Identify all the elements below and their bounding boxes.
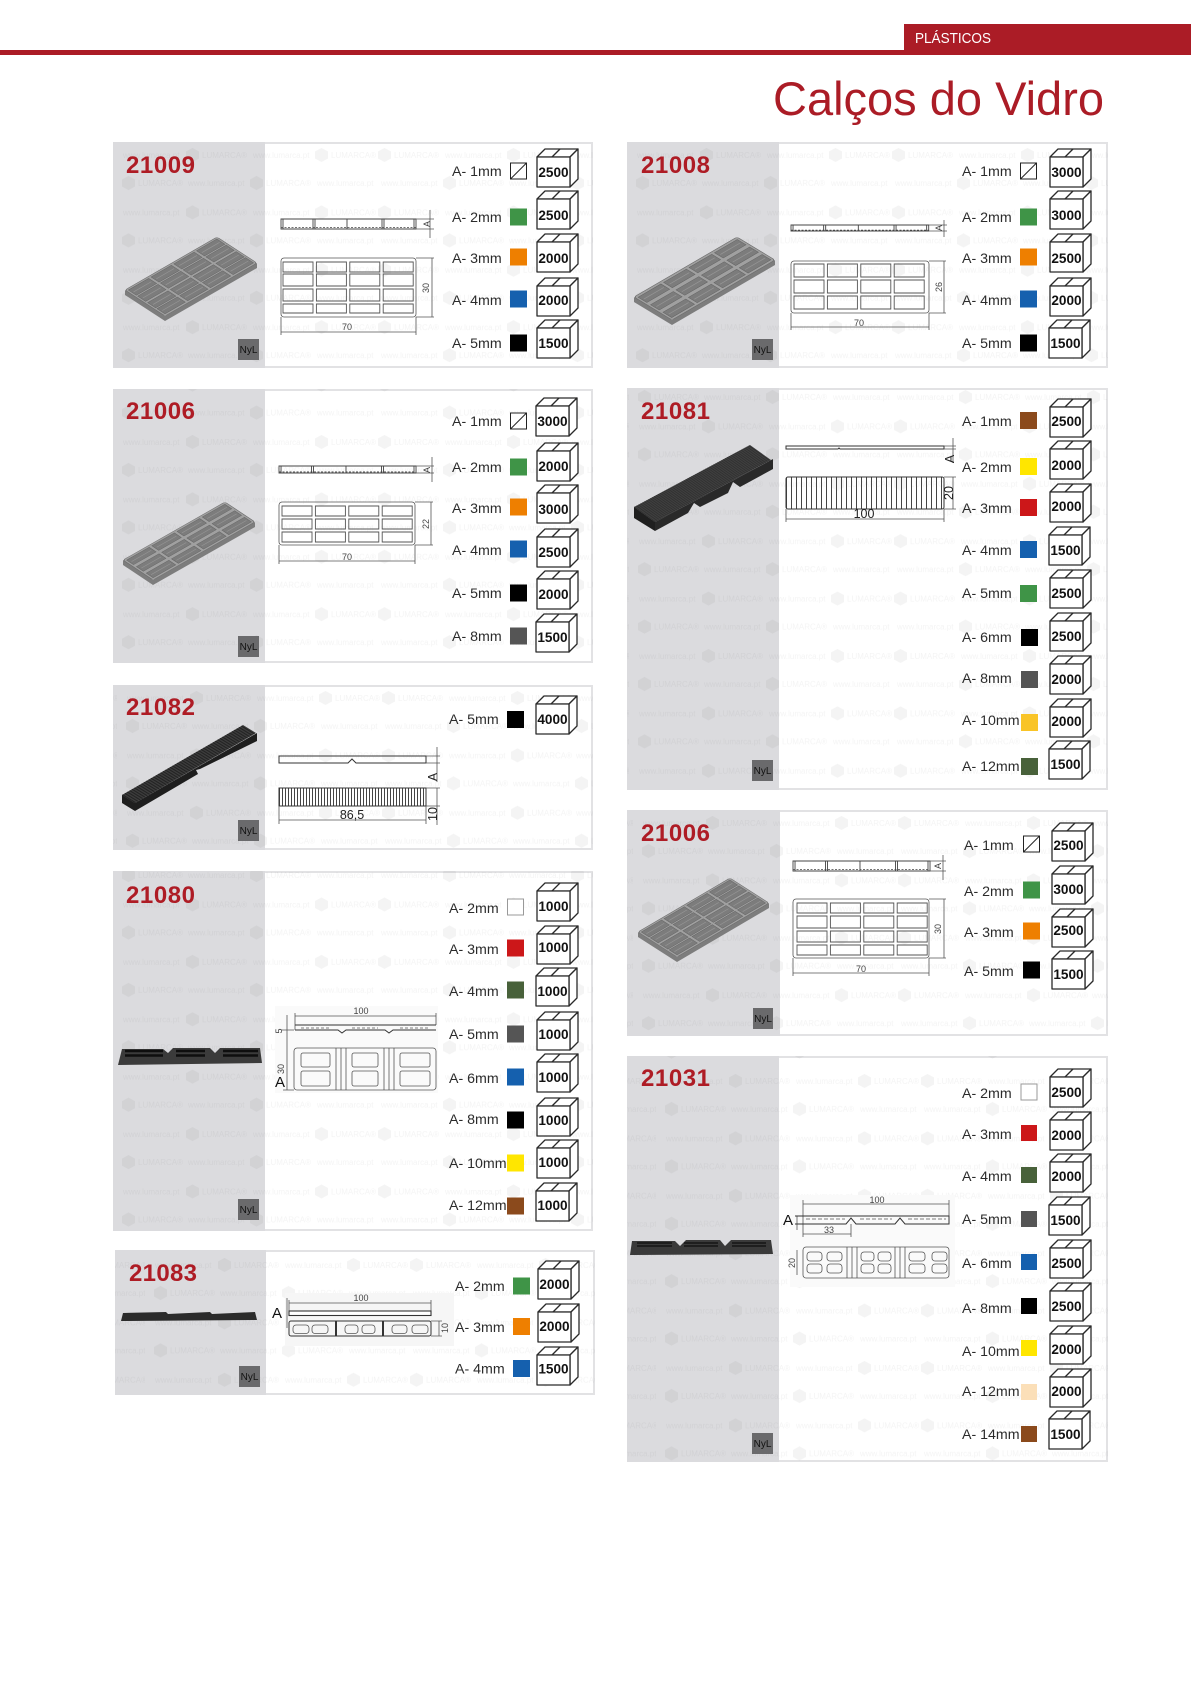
product render (638, 878, 769, 962)
row A-2mm 2000 (452, 443, 578, 481)
row A-5mm 2000 (452, 571, 578, 609)
row A-6mm 2500: 2500 (1051, 1256, 1082, 1271)
badge NyL (238, 339, 259, 360)
row A-8mm 1000: 1000 (538, 1113, 569, 1128)
row A-12mm 2000 (962, 1369, 1091, 1407)
badge NyL: NyL (240, 1205, 258, 1216)
row A-5mm 1500: 1500 (1050, 1213, 1081, 1228)
title: Calços do Vidro (773, 72, 1104, 125)
code 21080: 21080 (126, 882, 195, 909)
row A-4mm 2500 (452, 529, 578, 567)
row A-2mm 3000: 3000 (1051, 208, 1082, 223)
row A-4mm 1000 (449, 968, 577, 1006)
row A-8mm 1000 (449, 1098, 578, 1136)
row A-2mm 3000: A- 2mm (964, 884, 1014, 900)
technical drawing: A (422, 221, 432, 227)
row A-2mm 2000: 2000 (538, 459, 569, 474)
row A-2mm 2500 (452, 191, 578, 229)
row A-5mm 1500: A- 5mm (452, 336, 502, 352)
badge NyL (752, 760, 773, 781)
row A-8mm 2500: 2500 (1051, 1299, 1082, 1314)
row A-3mm 2000 (962, 1112, 1091, 1150)
panel: 21080 (113, 871, 593, 1231)
row A-3mm 3000: 3000 (538, 502, 569, 517)
row A-3mm 2500 (962, 234, 1091, 272)
row A-5mm 2500 (962, 570, 1091, 608)
row A-4mm 2500: A- 4mm (452, 543, 502, 559)
technical drawing: 5 (274, 1028, 284, 1034)
row A-8mm 1500: 1500 (537, 630, 568, 645)
technical drawing: 70 (342, 552, 352, 562)
row A-5mm 1500: 1500 (1053, 967, 1084, 982)
technical drawing: A (426, 772, 440, 781)
row A-5mm 1500: 1500 (538, 336, 569, 351)
row A-1mm 2500 (962, 399, 1091, 437)
technical drawing: 30 (933, 924, 943, 934)
row A-1mm 2500 (452, 149, 578, 187)
code 21083: 21083 (129, 1260, 197, 1287)
row A-2mm 2000 (962, 441, 1091, 479)
badge NyL (752, 1433, 773, 1454)
technical drawing: 20 (942, 486, 956, 500)
row A-4mm 2000 (452, 278, 578, 316)
row A-1mm 3000: 3000 (537, 414, 568, 429)
row A-2mm 1000: A- 2mm (449, 901, 499, 917)
panel: 21031 (627, 1056, 1108, 1462)
row A-4mm 2000: 2000 (1051, 293, 1082, 308)
badge NyL: NyL (754, 345, 772, 356)
row A-2mm 3000 (962, 191, 1091, 229)
panel: 21006 left (113, 389, 593, 663)
badge NyL: NyL (240, 345, 258, 356)
badge NyL: NyL (240, 642, 258, 653)
row A-5mm 1500: A- 5mm (964, 964, 1014, 980)
row A-8mm 2000 (962, 656, 1091, 694)
technical drawing (279, 457, 434, 564)
row A-2mm 3000: A- 2mm (962, 210, 1012, 226)
row A-2mm 3000: 3000 (1053, 882, 1084, 897)
row A-14mm 1500: 1500 (1050, 1427, 1081, 1442)
row A-6mm 2500: 2500 (1051, 629, 1082, 644)
row A-4mm 1500 (455, 1347, 578, 1385)
row A-5mm 2000: 2000 (538, 587, 569, 602)
panel: 21082 (113, 685, 593, 850)
row A-3mm 2500: 2500 (1051, 251, 1082, 266)
row A-4mm 1500: 1500 (1050, 543, 1081, 558)
technical drawing: 33 (824, 1225, 834, 1235)
technical drawing: A (783, 1212, 793, 1229)
technical drawing: 26 (934, 282, 944, 292)
row A-4mm 1500: 1500 (538, 1362, 569, 1376)
badge NyL (752, 339, 773, 360)
product render (125, 237, 257, 321)
row A-3mm 2500: 2500 (1053, 923, 1084, 938)
panel: 21081 (627, 388, 1108, 790)
row A-2mm 2500: A- 2mm (452, 210, 502, 226)
row A-4mm 2000: 2000 (1051, 1169, 1082, 1184)
product render (122, 725, 257, 811)
row A-8mm 2500: A- 8mm (962, 1301, 1012, 1317)
row A-6mm 1000: A- 6mm (449, 1071, 499, 1087)
technical drawing: 100 (854, 507, 874, 521)
row A-3mm 2000: A- 3mm (452, 251, 502, 267)
technical drawing (786, 438, 957, 522)
technical drawing: A (943, 454, 957, 463)
row A-3mm 2000 (962, 484, 1091, 522)
row A-5mm 1500 (964, 951, 1093, 989)
row A-3mm 2000: A- 3mm (455, 1320, 505, 1336)
row A-2mm 2000 (455, 1261, 579, 1299)
row A-4mm 1500 (962, 527, 1090, 565)
badge NyL: NyL (241, 1372, 259, 1383)
row A-3mm 3000: A- 3mm (452, 501, 502, 517)
code 21081: 21081 (641, 398, 710, 425)
row A-6mm 1000 (449, 1054, 578, 1092)
technical drawing: 70 (856, 964, 866, 974)
product render (634, 445, 773, 531)
row A-3mm 2000 (455, 1304, 579, 1342)
technical drawing: 70 (854, 318, 864, 328)
row A-2mm 1000: 1000 (538, 899, 569, 914)
badge NyL (238, 820, 259, 841)
row A-10mm 1000: A- 10mm (449, 1156, 507, 1172)
row A-2mm 2500: A- 2mm (962, 1086, 1012, 1102)
row A-12mm 1000 (449, 1183, 577, 1221)
row A-4mm 2000: A- 4mm (962, 1169, 1012, 1185)
row A-3mm 2000 (452, 234, 578, 272)
badge NyL (753, 1008, 773, 1029)
row A-12mm 1500: A- 12mm (962, 759, 1020, 775)
row A-4mm 2500: 2500 (538, 545, 569, 560)
row A-1mm 2500 (964, 823, 1093, 861)
row A-1mm 2500: 2500 (1051, 414, 1082, 429)
row A-5mm 1500 (962, 320, 1090, 358)
row A-2mm 2500 (962, 1069, 1091, 1107)
row A-2mm 2000: A- 2mm (962, 460, 1012, 476)
row A-4mm 2000: A- 4mm (452, 293, 502, 309)
panel: 21083 (115, 1250, 595, 1395)
technical drawing (791, 220, 947, 330)
row A-2mm 2000: 2000 (539, 1277, 570, 1292)
row A-5mm 1000: 1000 (538, 1027, 569, 1042)
row A-4mm 2000: 2000 (538, 293, 569, 308)
technical drawing: 22 (421, 519, 431, 529)
row A-1mm 3000 (452, 398, 577, 436)
row A-4mm 2000 (962, 278, 1091, 316)
row A-3mm 2000: 2000 (538, 251, 569, 266)
row A-4mm 2000 (962, 1154, 1091, 1192)
row A-6mm 1000: 1000 (538, 1070, 569, 1085)
row A-1mm 3000: 3000 (1051, 165, 1082, 180)
row A-3mm 2500: A- 3mm (962, 251, 1012, 267)
row A-1mm 2500: 2500 (1053, 838, 1084, 853)
technical drawing: 20 (787, 1258, 797, 1268)
row A-12mm 1000: 1000 (537, 1198, 568, 1213)
technical drawing: A (934, 225, 944, 231)
row A-6mm 2500 (962, 1240, 1091, 1278)
technical drawing: A (275, 1074, 285, 1091)
badge NyL: NyL (754, 1014, 772, 1025)
row A-1mm 2500: 2500 (538, 165, 569, 180)
technical drawing (272, 1293, 454, 1346)
row A-6mm 2500: A- 6mm (962, 630, 1012, 646)
row A-1mm 2500: A- 1mm (962, 414, 1012, 430)
row A-5mm 1500 (452, 320, 578, 358)
technical drawing: A (933, 863, 943, 869)
row A-6mm 2500: A- 6mm (962, 1256, 1012, 1272)
row A-6mm 2500 (962, 613, 1091, 651)
row A-12mm 2000: A- 12mm (962, 1384, 1020, 1400)
product render (123, 502, 255, 585)
row A-3mm 1000: 1000 (538, 940, 569, 955)
technical drawing: 30 (276, 1064, 286, 1074)
badge NyL: NyL (240, 826, 258, 837)
row A-4mm 2000: A- 4mm (962, 293, 1012, 309)
row A-2mm 2000: 2000 (1051, 458, 1082, 473)
row A-10mm 2000 (962, 699, 1091, 737)
panel: 21009 (113, 142, 593, 368)
row A-1mm 3000: A- 1mm (962, 164, 1012, 180)
row A-1mm 3000 (962, 149, 1091, 187)
row A-12mm 1500 (962, 741, 1090, 779)
row A-10mm 2000: A- 10mm (962, 1344, 1020, 1360)
row A-5mm 1500: A- 5mm (962, 1212, 1012, 1228)
row A-5mm 4000: 4000 (537, 712, 568, 727)
row A-3mm 2500: A- 3mm (964, 925, 1014, 941)
product render (118, 1048, 262, 1065)
row A-12mm 1000: A- 12mm (449, 1198, 507, 1214)
row A-3mm 1000: A- 3mm (449, 942, 499, 958)
row A-2mm 2000: A- 2mm (455, 1279, 505, 1295)
technical drawing: 70 (342, 322, 352, 332)
row A-4mm 1000: 1000 (537, 984, 568, 999)
row A-8mm 2000: A- 8mm (962, 671, 1012, 687)
row A-5mm 1500 (962, 1197, 1090, 1235)
row A-3mm 2000: 2000 (1051, 1128, 1082, 1143)
row A-10mm 1000: 1000 (538, 1155, 569, 1170)
technical drawing (274, 1006, 438, 1093)
row A-1mm 3000: A- 1mm (452, 414, 502, 430)
row A-10mm 2000 (962, 1326, 1091, 1364)
technical drawing (279, 747, 440, 825)
code 21006: 21006 (641, 820, 710, 847)
row A-3mm 2500 (964, 909, 1093, 947)
technical drawing (783, 1195, 955, 1287)
row A-2mm 2500: 2500 (1051, 1085, 1082, 1100)
technical drawing: A (272, 1305, 282, 1322)
row A-4mm 1500: A- 4mm (962, 543, 1012, 559)
row A-12mm 2000: 2000 (1051, 1384, 1082, 1399)
code 21082: 21082 (126, 694, 195, 721)
row A-8mm 1000: A- 8mm (449, 1112, 499, 1128)
panel: 21008 (627, 142, 1108, 368)
row A-8mm 1500 (452, 614, 577, 652)
code 21009: 21009 (126, 152, 195, 179)
row A-1mm 2500: A- 1mm (964, 838, 1014, 854)
row A-2mm 2500: 2500 (538, 208, 569, 223)
technical drawing (793, 855, 946, 976)
row A-14mm 1500 (962, 1411, 1090, 1449)
badge NyL (239, 1366, 260, 1387)
product render (121, 1312, 257, 1321)
row A-5mm 4000 (449, 696, 577, 734)
row A-8mm 2000: 2000 (1051, 672, 1082, 687)
row A-2mm 2000: A- 2mm (452, 460, 502, 476)
row A-2mm 1000 (449, 883, 578, 921)
row A-3mm 1000 (449, 926, 578, 964)
row A-5mm 2500: 2500 (1051, 586, 1082, 601)
row A-3mm 2000: 2000 (1051, 499, 1082, 514)
row A-2mm 3000 (964, 866, 1093, 904)
row A-5mm 1000 (449, 1012, 578, 1050)
row A-4mm 1000: A- 4mm (449, 984, 499, 1000)
row A-10mm 1000 (449, 1140, 578, 1178)
row A-3mm 3000 (452, 485, 578, 523)
technical drawing (281, 210, 434, 335)
row A-10mm 2000: 2000 (1051, 714, 1082, 729)
product render (630, 1240, 773, 1255)
panel: 21006 right (627, 810, 1108, 1036)
product render (634, 237, 775, 325)
row A-5mm 1000: A- 5mm (449, 1027, 499, 1043)
badge NyL: NyL (754, 766, 772, 777)
technical drawing: 86,5 (340, 808, 364, 822)
header tab: category (904, 24, 1191, 54)
header tab: category: PLÁSTICOS (915, 30, 991, 47)
badge NyL: NyL (754, 1439, 772, 1450)
row A-8mm 2500 (962, 1283, 1091, 1321)
technical drawing: 100 (353, 1293, 369, 1303)
technical drawing: 10 (440, 1323, 450, 1333)
code 21008: 21008 (641, 152, 710, 179)
technical drawing: 100 (869, 1195, 885, 1205)
technical drawing: 10 (426, 807, 440, 821)
row A-5mm 4000: A- 5mm (449, 712, 499, 728)
row A-5mm 2500: A- 5mm (962, 586, 1012, 602)
technical drawing: A (422, 467, 432, 473)
row A-3mm 2000: A- 3mm (962, 501, 1012, 517)
row A-5mm 1500: A- 5mm (962, 336, 1012, 352)
row A-14mm 1500: A- 14mm (962, 1427, 1020, 1443)
code 21006: 21006 (126, 398, 195, 425)
badge NyL (238, 1199, 259, 1220)
row A-10mm 2000: 2000 (1051, 1342, 1082, 1357)
row A-1mm 2500: A- 1mm (452, 164, 502, 180)
row A-3mm 2000: A- 3mm (962, 1127, 1012, 1143)
technical drawing: 100 (353, 1006, 369, 1016)
row A-12mm 1500: 1500 (1050, 757, 1081, 772)
badge NyL (238, 636, 259, 657)
row A-5mm 1500: 1500 (1050, 336, 1081, 351)
row A-4mm 1500: A- 4mm (455, 1362, 505, 1378)
code 21031: 21031 (641, 1065, 710, 1092)
technical drawing: 30 (421, 283, 431, 293)
row A-8mm 1500: A- 8mm (452, 629, 502, 645)
row A-3mm 2000: 2000 (539, 1319, 570, 1334)
row A-10mm 2000: A- 10mm (962, 713, 1020, 729)
row A-5mm 2000: A- 5mm (452, 586, 502, 602)
header bar (0, 50, 1191, 55)
